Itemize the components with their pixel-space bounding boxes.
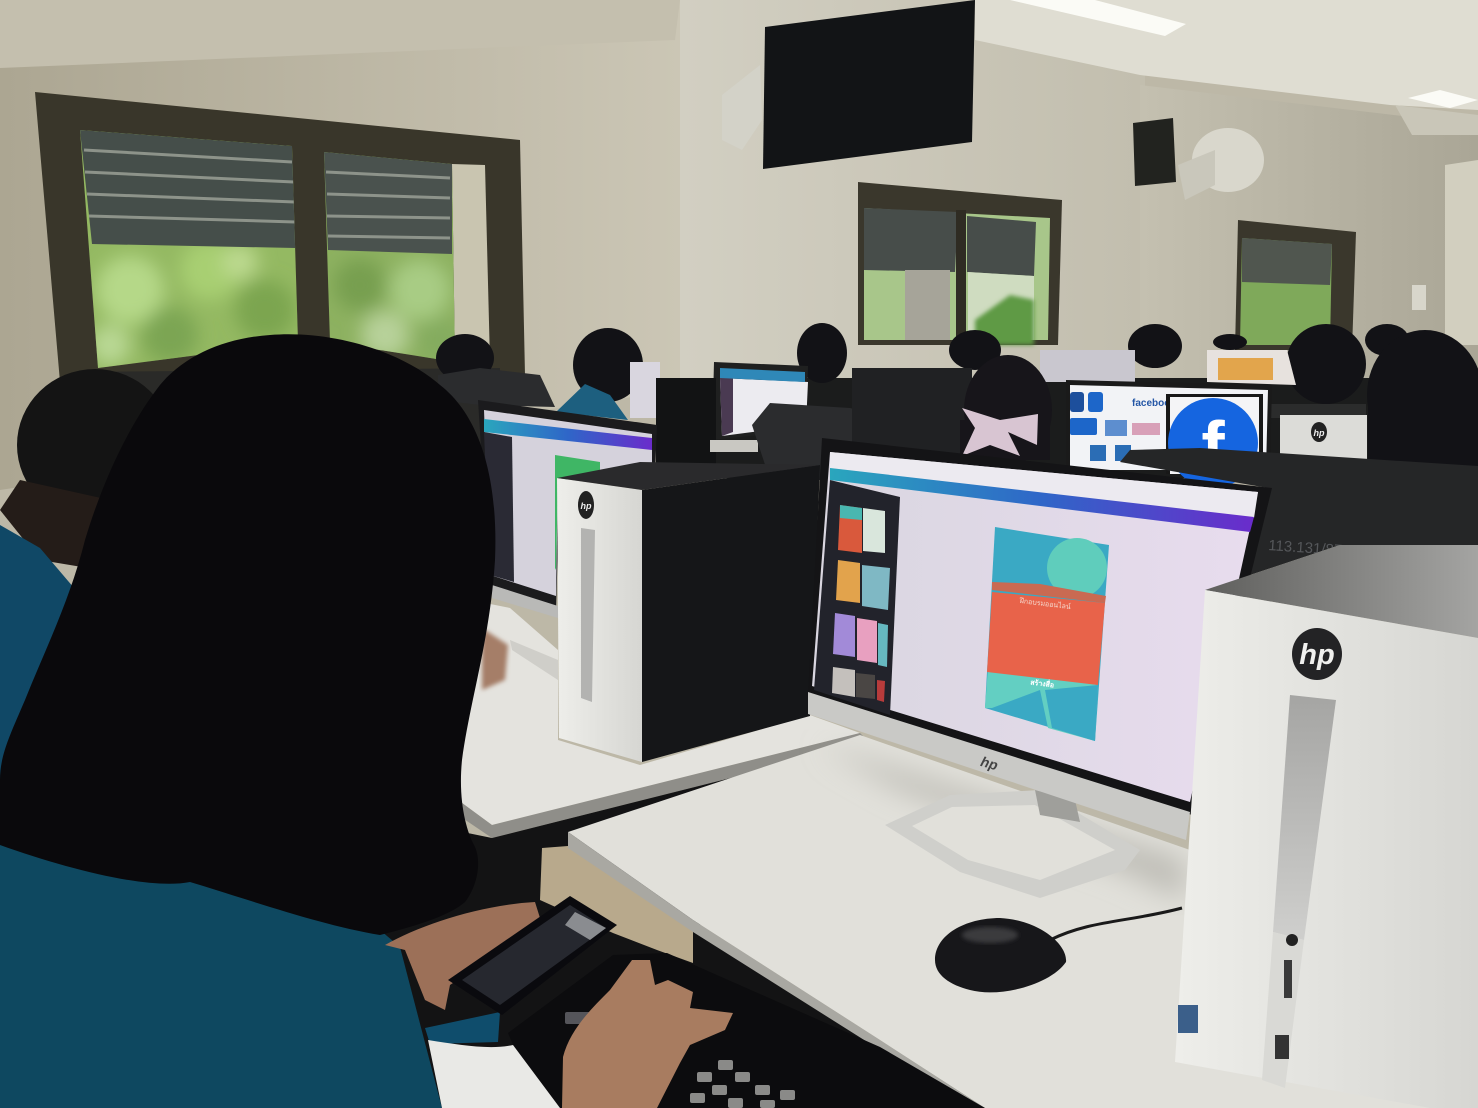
black chair backs — [438, 368, 1478, 575]
ceiling lights — [1010, 0, 1478, 108]
foreground PC tower — [1175, 545, 1478, 1108]
browser bar — [830, 452, 1258, 518]
woman's hair — [0, 334, 495, 935]
monitor bezel — [808, 692, 1190, 840]
facebook screen monitor: facebook — [1132, 398, 1176, 409]
woman's shirt — [0, 820, 560, 1108]
under-desk shadow and floor — [380, 743, 985, 1108]
design poster: สร้างสื่อ — [1030, 677, 1055, 689]
foreground monitor stand — [885, 790, 1140, 898]
icon: hp logo: hp — [580, 501, 592, 511]
second row desk — [458, 600, 870, 838]
icon: hp logo back PC: hp — [1314, 428, 1325, 438]
icon: facebook logo: f — [1201, 407, 1225, 485]
left student — [0, 369, 508, 800]
keyboard — [508, 953, 985, 1108]
speaker — [1133, 118, 1176, 186]
design poster — [985, 527, 1109, 741]
screen — [812, 452, 1258, 802]
background students — [436, 323, 1478, 470]
hp logo — [1292, 628, 1342, 680]
hands and phone — [385, 896, 733, 1108]
icon: facebook logo — [1166, 394, 1263, 488]
background monitors — [630, 350, 1367, 466]
centre window — [858, 182, 1062, 345]
right window — [1235, 220, 1356, 350]
student with bow — [960, 355, 1052, 465]
second row PC tower — [557, 462, 820, 762]
back rows of dark furniture — [80, 368, 1478, 560]
icon: hp logo — [578, 491, 594, 519]
silver strip — [1273, 695, 1336, 940]
wall fan right — [1178, 128, 1264, 200]
foreground monitor: hp — [979, 753, 1000, 773]
hp logo: hp — [1299, 639, 1335, 671]
far right door and wall fixtures — [1412, 160, 1478, 345]
wall-mounted TV — [763, 0, 975, 169]
second row monitor — [478, 400, 657, 680]
mouse and cable — [935, 908, 1182, 992]
foreground desk — [568, 735, 1478, 1108]
icon: pink hair bow — [962, 408, 1038, 456]
design poster: ฝึกอบรมออนไลน์ — [1019, 596, 1071, 611]
facebook screen monitor — [1066, 380, 1272, 488]
reflected address text on chair: 113.131/87 — [1268, 537, 1343, 559]
icon: hp logo back PC — [1311, 422, 1327, 442]
sidebar — [814, 480, 900, 715]
foreground monitor — [808, 438, 1272, 840]
left window — [35, 92, 525, 382]
wall fan left — [722, 65, 762, 150]
